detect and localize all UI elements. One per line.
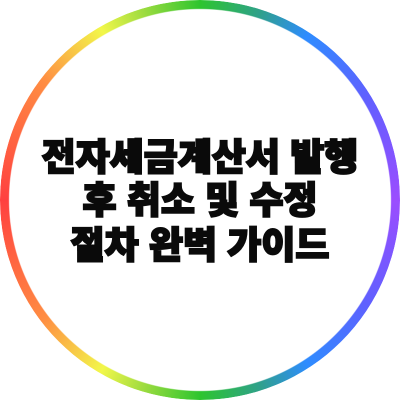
title line 3: 절차 완벽 가이드: [71, 225, 329, 266]
title line 2: 후 취소 및 수정: [82, 180, 318, 221]
title line 1: 전자세금계산서 발행: [42, 137, 358, 178]
